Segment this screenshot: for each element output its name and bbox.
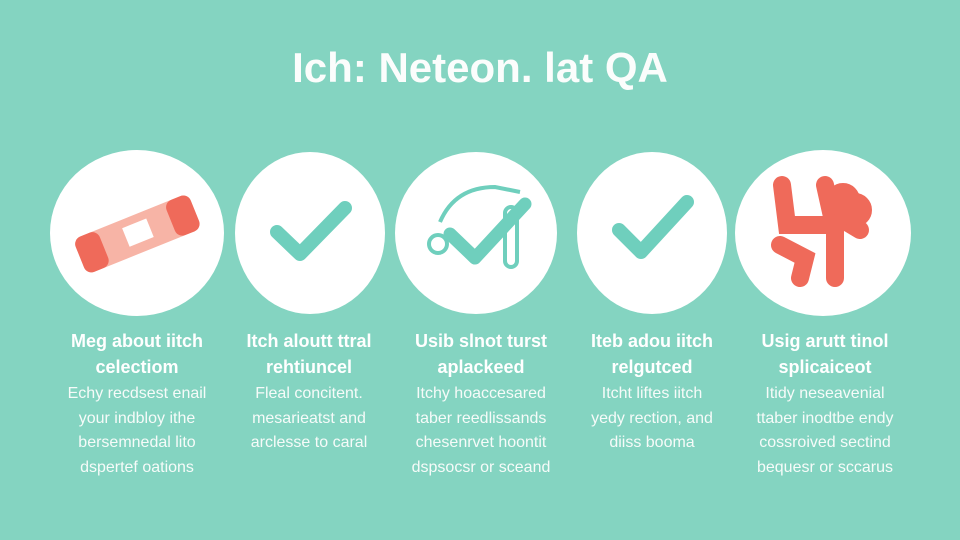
circle 1: bandage (50, 150, 224, 316)
column 4 text: Iteb adou iitch (591, 331, 713, 351)
circle 2: check (235, 152, 385, 314)
column 1 text: celectiom (95, 357, 179, 377)
column 1 text: Meg about iitch (71, 331, 203, 351)
column 5 text: bequesr or sccarus (757, 458, 893, 476)
column 3 text: taber reedlissands (416, 410, 546, 426)
column 2 text: rehtiuncel (266, 357, 352, 377)
column 4 text (591, 331, 713, 451)
column 1 text (68, 331, 206, 476)
circle 5: red figure (735, 150, 911, 316)
column 3 text: Itchy hoaccesared (416, 385, 546, 402)
column 1 text: your indbloy ithe (79, 410, 195, 426)
column 2 text (246, 331, 372, 451)
column 5 text: ttaber inodtbe endy (756, 410, 894, 426)
column 5 text: Itidy neseavenial (765, 385, 885, 402)
column 4 text: yedy rection, and (591, 410, 713, 426)
column 3 text: dspsocsr or sceand (412, 458, 550, 476)
column 4 text: diiss booma (609, 434, 695, 451)
title: Ich: Neteon. lat QA (292, 44, 668, 91)
column 4 text: relgutced (611, 357, 693, 377)
column 2 text: Itch aloutt ttral (246, 331, 372, 351)
column 1 text: bersemnedal lito (78, 434, 196, 451)
column 5 text: splicaiceot (778, 357, 872, 377)
column 5 text: Usig arutt tinol (762, 331, 888, 351)
column 2 text: mesarieatst and (252, 410, 366, 426)
column 2 text: Fleal concitent. (255, 385, 363, 402)
column 3 text: chesenrvet hoontit (416, 434, 546, 451)
column 5 text (756, 331, 894, 476)
column 4 text: Itcht liftes iitch (602, 385, 702, 402)
column 3 text: aplackeed (437, 357, 525, 377)
column 3 text (412, 331, 550, 476)
column 5 text: cossroived sectind (759, 434, 891, 451)
column 2 text: arclesse to caral (251, 434, 367, 451)
circle 4: check (577, 152, 727, 314)
column 1 text: dspertef oations (80, 458, 194, 476)
column 3 text: Usib slnot turst (415, 331, 547, 351)
column 1 text: Echy recdsest enail (68, 385, 206, 402)
circle 3: stethoscope check (395, 152, 557, 314)
